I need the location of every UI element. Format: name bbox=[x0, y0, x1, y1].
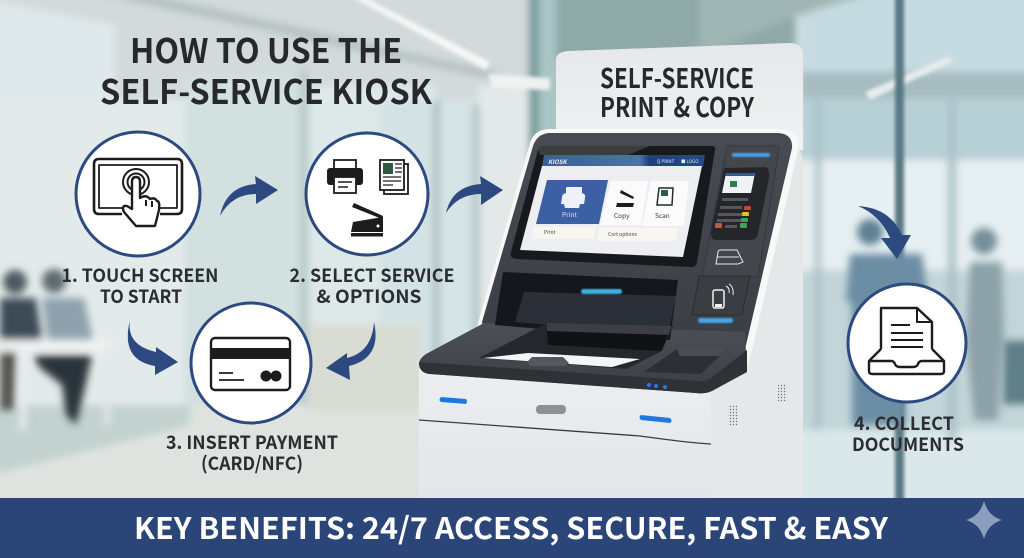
step 4 bbox=[848, 284, 966, 457]
paper output recess bbox=[479, 324, 673, 369]
phone icon bbox=[713, 284, 733, 308]
icon: touch screen bbox=[94, 159, 182, 226]
kiosk sign panel bbox=[556, 43, 803, 150]
body lights bbox=[440, 397, 467, 404]
touchscreen: KIOSK bbox=[548, 157, 568, 166]
floor bbox=[0, 405, 430, 510]
arrow: kiosk to step 4 bbox=[858, 206, 911, 259]
step 3 bbox=[166, 303, 338, 476]
arrow: step 2 to kiosk bbox=[446, 176, 503, 213]
touchscreen: Scan bbox=[655, 210, 670, 220]
output paper bbox=[483, 353, 640, 367]
blurred people standing bbox=[846, 219, 1004, 425]
circle bbox=[76, 132, 200, 256]
kiosk sign panel: SELF-SERVICE bbox=[600, 57, 754, 96]
left windows bbox=[0, 100, 185, 420]
arrow: step 1 to 2 bbox=[220, 176, 278, 216]
circle bbox=[306, 133, 428, 255]
icon: payment card bbox=[211, 338, 290, 390]
label: DOCUMENTS bbox=[852, 431, 964, 457]
touchscreen: Print bbox=[544, 229, 556, 236]
label: 1. TOUCH SCREEN bbox=[62, 262, 218, 288]
kiosk white shell bbox=[476, 129, 799, 372]
status dots bbox=[647, 383, 667, 389]
kiosk side panel bbox=[709, 140, 803, 498]
touchscreen: ■ LOGO bbox=[681, 159, 699, 165]
print option row bbox=[532, 227, 596, 239]
title: HOW TO USE THE bbox=[130, 24, 402, 73]
kiosk machine bbox=[419, 129, 803, 498]
right upper area bbox=[556, 0, 796, 60]
ceiling bbox=[0, 0, 540, 100]
options row bbox=[597, 228, 678, 241]
icon: scanner bbox=[351, 203, 383, 236]
step 2 bbox=[290, 133, 454, 309]
touchscreen: Print bbox=[562, 209, 577, 219]
kiosk dark slot top light bbox=[581, 289, 622, 294]
icon: sparkle bbox=[966, 501, 1002, 539]
touchscreen bbox=[520, 155, 705, 257]
title bbox=[100, 24, 433, 114]
label: (CARD/NFC) bbox=[201, 450, 303, 476]
arrow: step 1 to 3 bbox=[128, 320, 178, 375]
icon: documents bbox=[380, 160, 408, 194]
scan tile bbox=[642, 181, 689, 226]
right control column bbox=[702, 146, 779, 277]
dark pillar bbox=[895, 0, 904, 505]
arrow: step 2 to 3 bbox=[326, 322, 376, 380]
ceiling light bbox=[350, 0, 490, 70]
label: 2. SELECT SERVICE bbox=[290, 262, 454, 288]
payment terminal bbox=[711, 167, 769, 240]
touchscreen: Q PRINT bbox=[657, 159, 675, 165]
card icon on panel bbox=[716, 250, 743, 264]
circle bbox=[848, 284, 966, 402]
benefits banner bbox=[0, 498, 1024, 558]
kiosk upper dark panel bbox=[482, 133, 792, 360]
nfc light bbox=[698, 318, 733, 323]
touchscreen: Copy bbox=[614, 210, 630, 220]
screen bezel bbox=[511, 146, 715, 267]
speaker dots bbox=[728, 383, 787, 427]
label: TO START bbox=[100, 283, 182, 309]
side tray bbox=[644, 349, 727, 374]
benefits banner: KEY BENEFITS: 24/7 ACCESS, SECURE, FAST & EASY bbox=[134, 504, 889, 548]
blurred people at table bbox=[0, 269, 112, 430]
label: & OPTIONS bbox=[316, 283, 422, 309]
icon: document tray bbox=[869, 308, 944, 374]
kiosk sign panel: PRINT & COPY bbox=[600, 86, 754, 125]
icon: printer bbox=[327, 160, 363, 193]
paper output hood bbox=[495, 272, 678, 340]
circle bbox=[191, 303, 311, 423]
print tile bbox=[536, 180, 608, 224]
nfc panel bbox=[692, 276, 750, 315]
copy tile bbox=[600, 181, 648, 225]
kiosk lower body bbox=[419, 368, 711, 498]
touchscreen: Cort options bbox=[608, 231, 638, 238]
title: SELF-SERVICE KIOSK bbox=[100, 65, 433, 114]
label: 3. INSERT PAYMENT bbox=[166, 429, 338, 455]
kiosk counter bbox=[419, 323, 747, 393]
step 1 bbox=[62, 132, 218, 309]
label: 4. COLLECT bbox=[854, 410, 954, 436]
